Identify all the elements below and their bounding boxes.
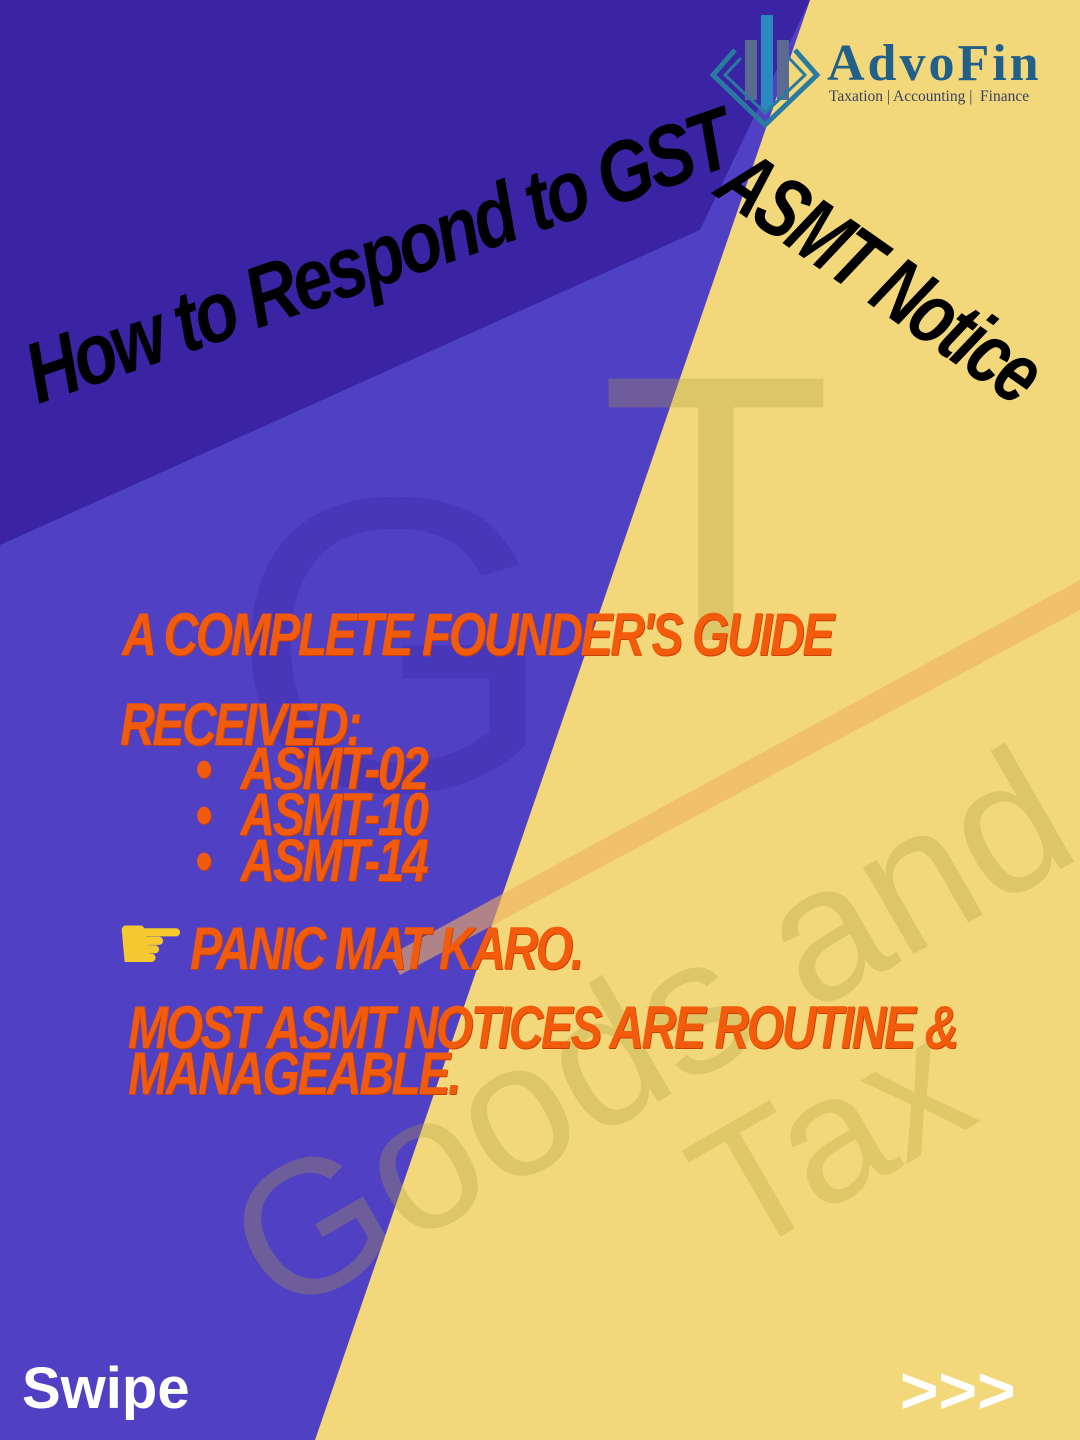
panic line (115, 899, 582, 988)
received list (120, 691, 430, 894)
background shapes: T (600, 296, 832, 721)
title (13, 91, 1059, 422)
note text (128, 994, 957, 1107)
title: ASMT Notice (701, 131, 1059, 421)
item 02: • ASMT-02 (195, 735, 426, 802)
panic line: PANIC MAT KARO. (190, 915, 582, 982)
brand name: AdvoFin (827, 35, 1042, 92)
item 14: • ASMT-14 (195, 827, 426, 894)
swipe: Swipe (22, 1356, 190, 1421)
logo (710, 15, 1042, 128)
note text: MOST ASMT NOTICES ARE ROUTINE & (128, 994, 957, 1061)
icon: pointing hand: ☛ (115, 899, 187, 988)
subtitle: A COMPLETE FOUNDER'S GUIDE (122, 601, 832, 668)
arrows: >>> (900, 1353, 1016, 1427)
background shapes: G (230, 411, 557, 880)
background shapes: Tax (659, 980, 1002, 1294)
tagline: Taxation | Accounting | Finance (829, 88, 1029, 105)
item 10: • ASMT-10 (195, 781, 426, 848)
note text: MANAGEABLE. (128, 1040, 459, 1107)
received list: RECEIVED: (120, 691, 360, 758)
icon: logo mark (710, 15, 820, 128)
title: How to Respond to GST (13, 91, 742, 422)
